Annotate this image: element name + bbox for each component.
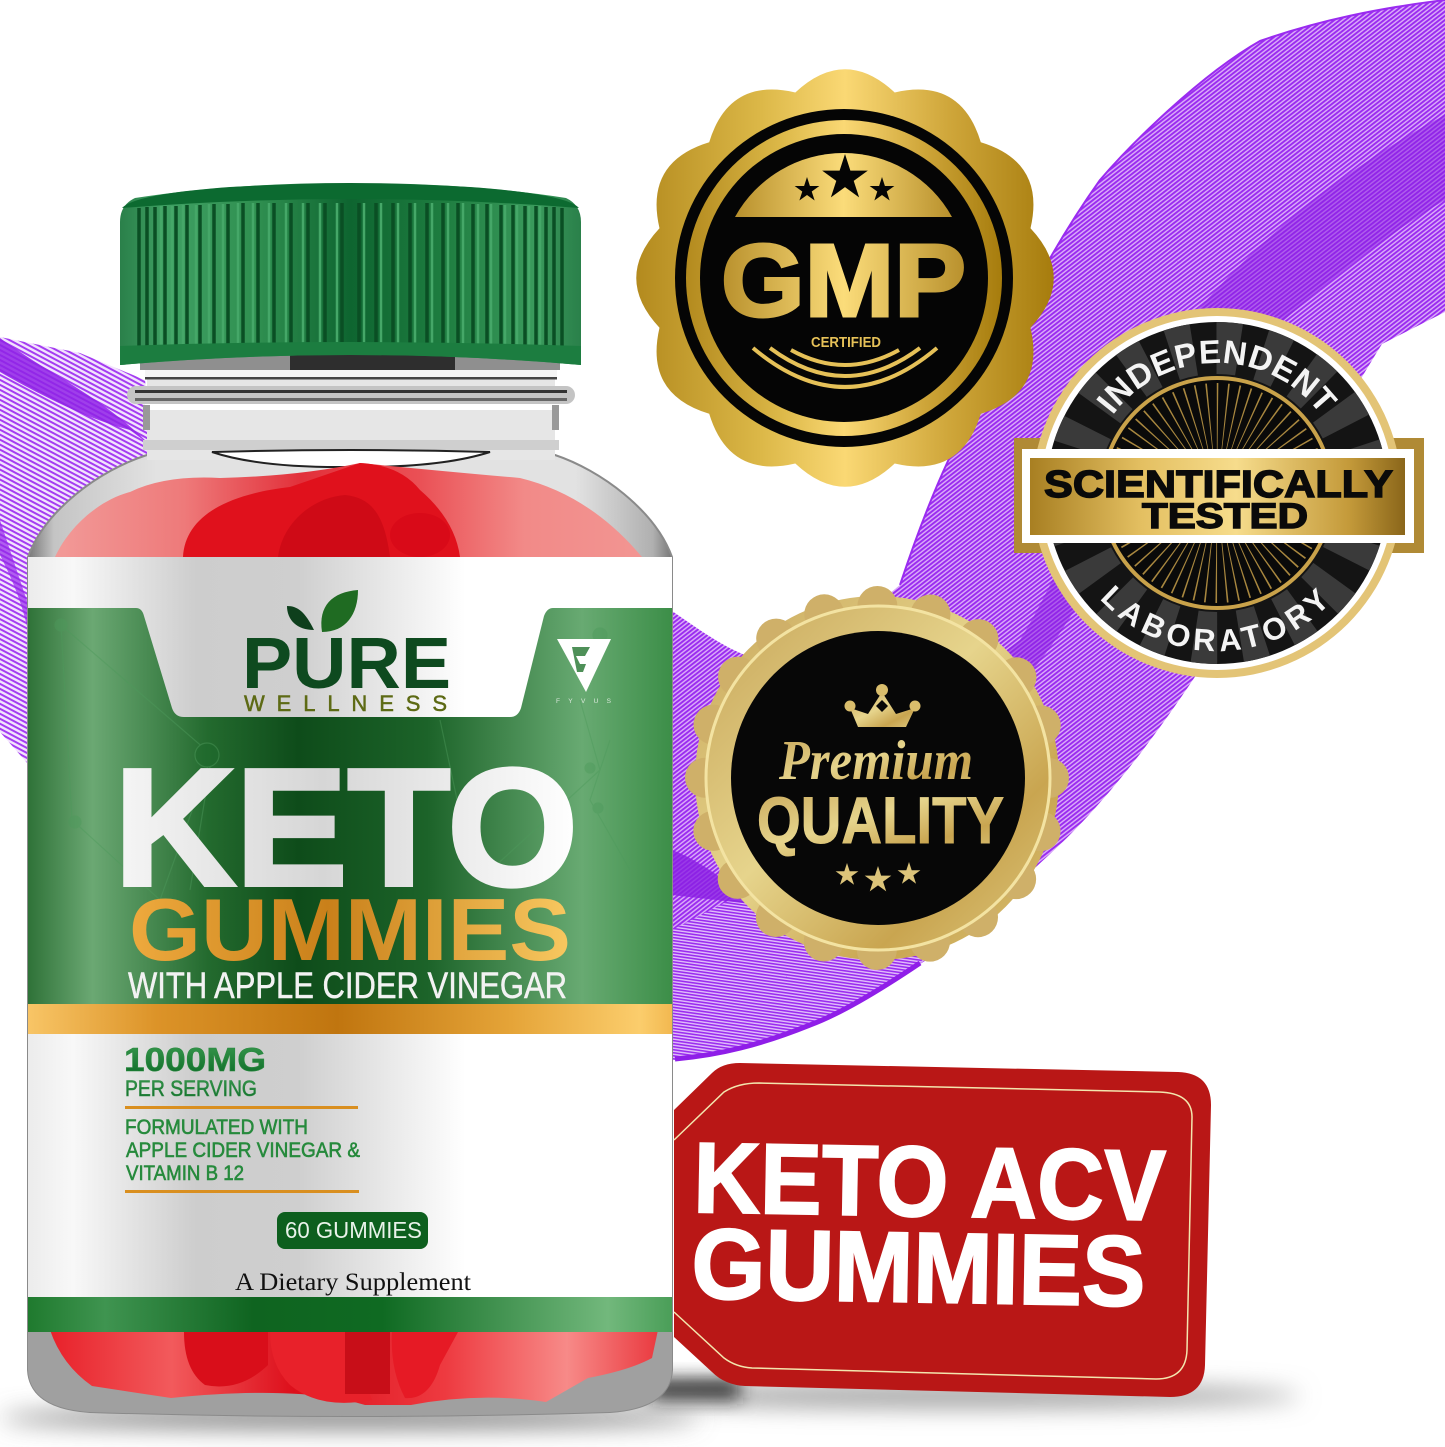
dosage: PER SERVING — [125, 1076, 257, 1101]
outer ring — [1032, 308, 1402, 678]
red tag — [674, 1063, 1211, 1397]
badge: scientifically tested — [1014, 308, 1424, 678]
heading: GUMMIES: GUMMIES — [129, 880, 571, 979]
tag shape — [674, 1063, 1211, 1397]
scalloped gold seal — [636, 69, 1054, 487]
gold inner ring — [706, 606, 1050, 950]
text: laboratory: LABORATORY — [1100, 585, 1326, 652]
formula text: FORMULATED WITH — [125, 1116, 308, 1139]
scalloped seal — [695, 596, 1059, 960]
banner back — [1014, 438, 1424, 553]
sun rays — [1152, 428, 1282, 558]
ground shadow — [0, 1380, 1300, 1428]
icon: stars — [795, 154, 894, 201]
icon: stars — [836, 862, 920, 891]
label green panel — [28, 608, 672, 1005]
icon: leaves — [287, 590, 358, 632]
dosage — [124, 1041, 266, 1101]
purple ribbon: right — [640, 0, 1445, 1062]
certified text: CERTIFIED — [811, 335, 881, 351]
divider 1 — [125, 1106, 358, 1109]
bottle — [28, 183, 672, 1416]
gold banner: TESTED — [1142, 497, 1308, 536]
heading: KETO: KETO — [114, 735, 578, 921]
dosage: 1000MG — [124, 1041, 266, 1078]
GMP text: GMP — [721, 223, 966, 338]
brand logo: Pure Wellness: PURE — [242, 624, 451, 704]
gold banner: SCIENTIFICALLY — [1044, 464, 1393, 506]
tag inner line — [674, 1083, 1192, 1379]
tag text: gummies: GUMMIES — [691, 1208, 1147, 1328]
tag text: keto acv: KETO ACV — [693, 1122, 1167, 1242]
subheading: WITH APPLE CIDER VINEGAR — [128, 965, 567, 1006]
purple ribbon: left — [0, 337, 160, 780]
divider 2 — [125, 1190, 359, 1193]
text: quality: QUALITY — [757, 783, 1004, 857]
text: premium: Premium — [778, 730, 973, 792]
icon: Fyvus logo: FYVUS — [556, 698, 612, 705]
brand logo: Pure Wellness: WELLNESS — [244, 691, 447, 716]
gold banner — [1022, 449, 1414, 543]
black center — [731, 631, 1025, 925]
badge: premium quality — [695, 596, 1059, 960]
segmented ring — [1072, 348, 1362, 638]
pill: 60 gummies — [277, 1212, 428, 1249]
text: independent: INDEPENDENT — [1096, 340, 1338, 414]
badge: GMP certified — [636, 69, 1054, 487]
gold arcs — [753, 348, 937, 387]
lower glass — [28, 1332, 672, 1416]
inner medallion — [1100, 376, 1334, 610]
text: dietary supplement: A Dietary Supplement — [235, 1269, 471, 1296]
formula text — [125, 1116, 360, 1185]
bottle cap — [120, 183, 581, 365]
gold arch — [735, 153, 952, 217]
brand logo: Pure Wellness — [242, 590, 451, 716]
network pattern — [55, 619, 630, 900]
icon: Fyvus logo — [556, 639, 612, 705]
gummies bottom — [50, 1330, 658, 1405]
icon: crown — [844, 684, 920, 727]
pill: 60 gummies: 60 GUMMIES — [285, 1217, 422, 1243]
glass body — [28, 455, 672, 1416]
green band — [28, 1297, 672, 1332]
formula text: APPLE CIDER VINEGAR & — [126, 1139, 360, 1162]
gummies top — [55, 463, 642, 557]
label background — [28, 557, 672, 1332]
formula text: VITAMIN B 12 — [126, 1162, 244, 1185]
orange band — [28, 1004, 672, 1034]
glass neck — [127, 355, 575, 467]
